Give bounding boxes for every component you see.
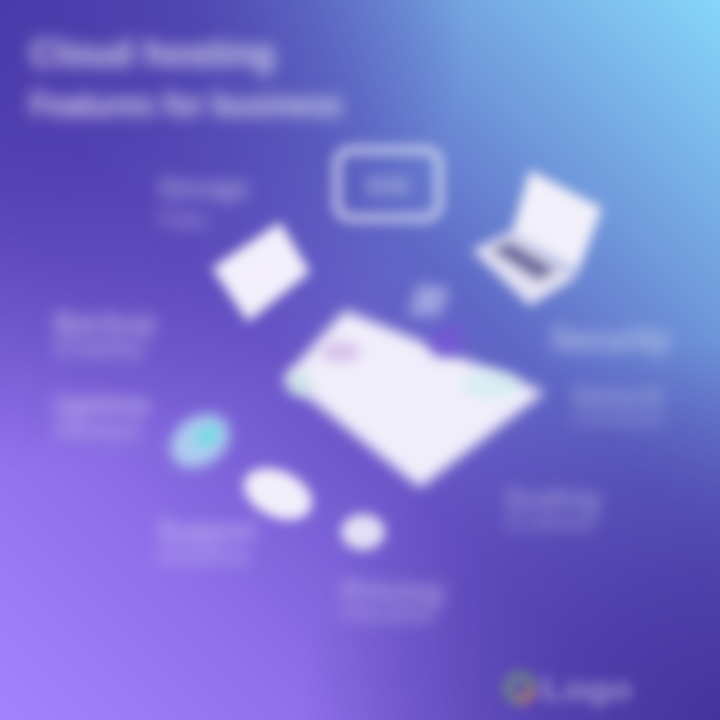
label: bottom left: Support xyxy=(158,515,256,546)
icon: cyan disc xyxy=(160,403,240,479)
label: bottom left: Anytime xyxy=(158,543,250,570)
label: bottom left xyxy=(158,515,256,570)
title: Features for business xyxy=(30,86,342,124)
label: top: Storage xyxy=(158,172,248,203)
label: left middle: Always xyxy=(54,414,142,444)
icon: small tile xyxy=(341,514,385,550)
label: right lower: Scaling xyxy=(505,483,600,513)
label: right middle: Global xyxy=(572,409,662,431)
chart fragment xyxy=(286,284,520,399)
label: left upper: Backup xyxy=(54,307,156,338)
label: right upper: Security xyxy=(550,321,670,357)
label: right lower xyxy=(505,483,600,536)
title xyxy=(30,33,342,124)
label: left upper: Daily xyxy=(54,332,146,362)
label: right middle xyxy=(572,381,664,431)
label: right middle: Network xyxy=(572,381,664,411)
label: right lower: On demand xyxy=(505,509,595,536)
logo xyxy=(508,671,632,707)
logo: Logo xyxy=(542,671,632,707)
label: bottom center xyxy=(342,575,444,628)
label: top xyxy=(158,172,248,234)
icon: tablet card xyxy=(212,222,310,322)
label: left middle: Uptime xyxy=(54,389,150,420)
central platform illustration xyxy=(284,284,545,488)
icon: pill card xyxy=(236,458,320,530)
label: bottom center: Pricing xyxy=(342,575,444,606)
icon: screen frame xyxy=(337,150,439,218)
label: left upper xyxy=(54,307,156,362)
label: top: Files xyxy=(158,207,208,234)
title: Cloud hosting xyxy=(30,33,275,75)
icon: laptop xyxy=(472,170,602,306)
label: left middle xyxy=(54,389,150,444)
label: bottom center: Flexible xyxy=(342,601,436,628)
